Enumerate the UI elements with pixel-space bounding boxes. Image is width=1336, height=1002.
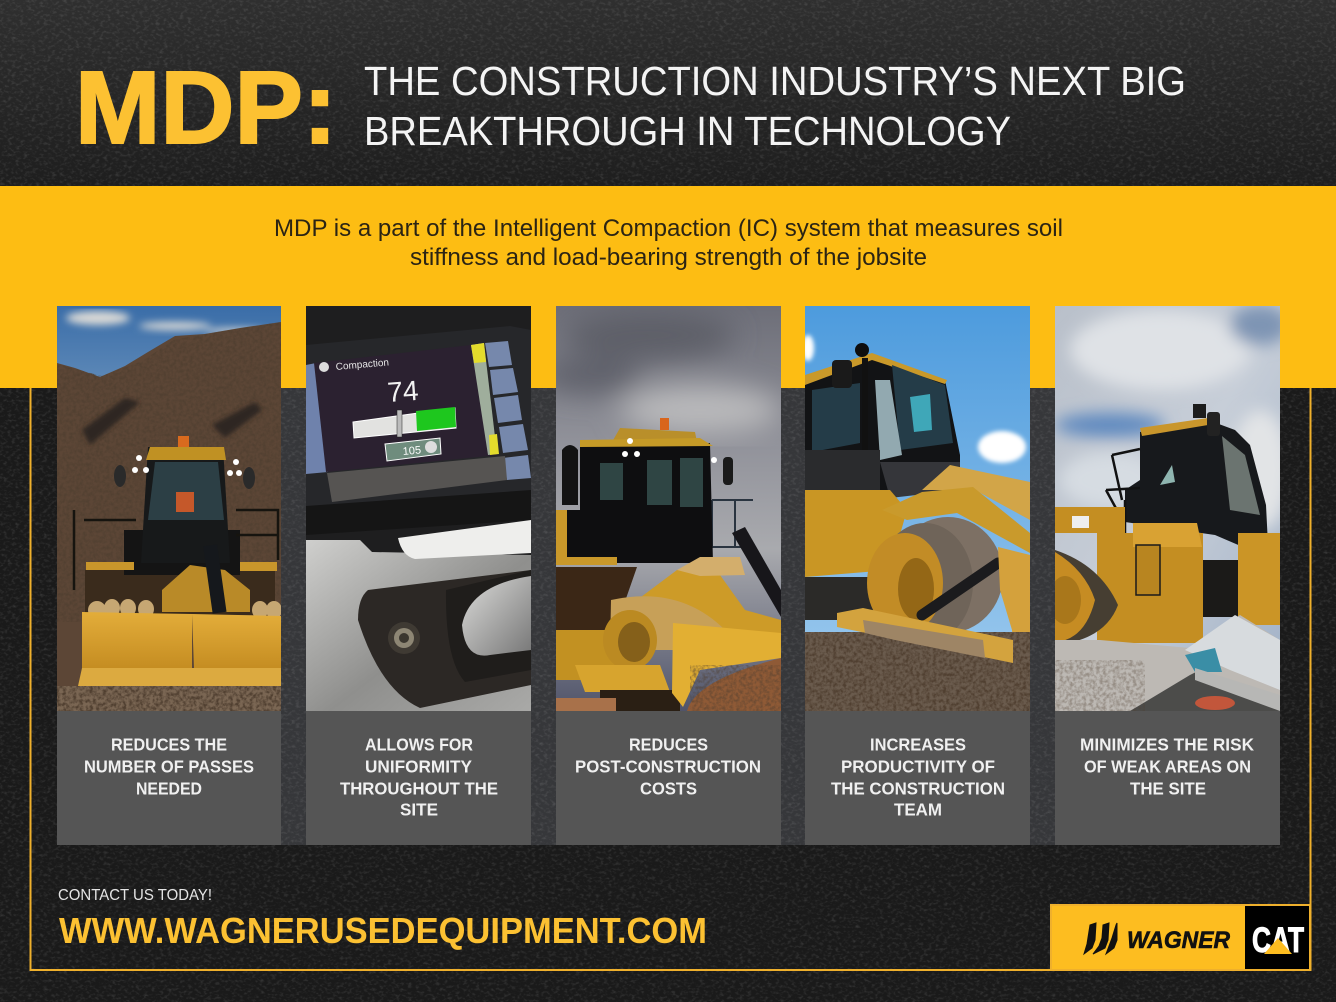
caption: UNIFORMITY: [365, 756, 472, 776]
caption: REDUCES THE: [111, 734, 227, 754]
website url: WWW.WAGNERUSEDEQUIPMENT.COM: [59, 910, 707, 951]
panel: productivity: [802, 306, 1030, 845]
caption: [575, 734, 761, 798]
caption: ALLOWS FOR: [365, 734, 473, 754]
panel: post-construction costs: [540, 306, 781, 845]
title: line two: BREAKTHROUGH IN TECHNOLOGY: [364, 108, 1011, 154]
intro text: [274, 215, 1063, 271]
caption: [340, 734, 498, 820]
title: line one: THE CONSTRUCTION INDUSTRY’S NEXT BIG: [364, 58, 1186, 104]
caption: REDUCES: [629, 734, 708, 754]
photo: compaction display: 74: [386, 375, 419, 408]
text box: [57, 711, 281, 845]
icon: cat triangle: [1264, 938, 1292, 954]
caption: TEAM: [894, 800, 942, 820]
photo: compactor wheel against blue sky: [802, 306, 1030, 711]
panel: uniformity: [306, 306, 531, 845]
title: [75, 50, 1186, 165]
machine: [85, 570, 275, 615]
text box: [556, 711, 781, 845]
caption: POST-CONSTRUCTION: [575, 756, 761, 776]
text box: [1055, 711, 1280, 845]
caption: MINIMIZES THE RISK: [1080, 734, 1254, 754]
intro text: MDP is a part of the Intelligent Compaction (IC) system that measures soil: [274, 215, 1063, 242]
panel: weak areas: [1049, 305, 1290, 845]
caption: [1080, 734, 1254, 798]
photo: compaction display: [306, 306, 531, 711]
photo: compaction display: Compaction: [335, 357, 389, 373]
caption: SITE: [400, 800, 438, 820]
caption: OF WEAK AREAS ON: [1084, 756, 1251, 776]
icon: wagner mark: [1084, 923, 1117, 954]
caption: THE SITE: [1130, 778, 1206, 798]
photo: compactor under grey sky: [540, 306, 781, 711]
frame outline: [30, 388, 1310, 970]
caption: INCREASES: [870, 734, 966, 754]
caption: THE CONSTRUCTION: [831, 778, 1005, 798]
wagner wordmark: WAGNER: [1127, 927, 1231, 954]
logo block: [1051, 905, 1310, 970]
caption: COSTS: [640, 778, 697, 798]
photo: compactor on landfill: [1049, 305, 1290, 711]
caption: [831, 734, 1005, 820]
text box: [306, 711, 531, 845]
caption: [84, 734, 254, 798]
contact label: CONTACT US TODAY!: [58, 887, 212, 904]
panel: reduces passes: [57, 306, 282, 845]
caption: THROUGHOUT THE: [340, 778, 498, 798]
title: MDP: MDP:: [75, 50, 337, 165]
caption: NUMBER OF PASSES: [84, 756, 254, 776]
caption: PRODUCTIVITY OF: [841, 756, 995, 776]
intro text: stiffness and load-bearing strength of the jobsite: [410, 244, 927, 271]
photo: compactor in front of mountain: [57, 306, 282, 711]
text box: [805, 711, 1030, 845]
photo: compaction display: 105: [402, 444, 422, 458]
cat wordmark: CAT: [1252, 921, 1304, 960]
yellow intro band: [0, 186, 1336, 388]
caption: NEEDED: [136, 778, 202, 798]
